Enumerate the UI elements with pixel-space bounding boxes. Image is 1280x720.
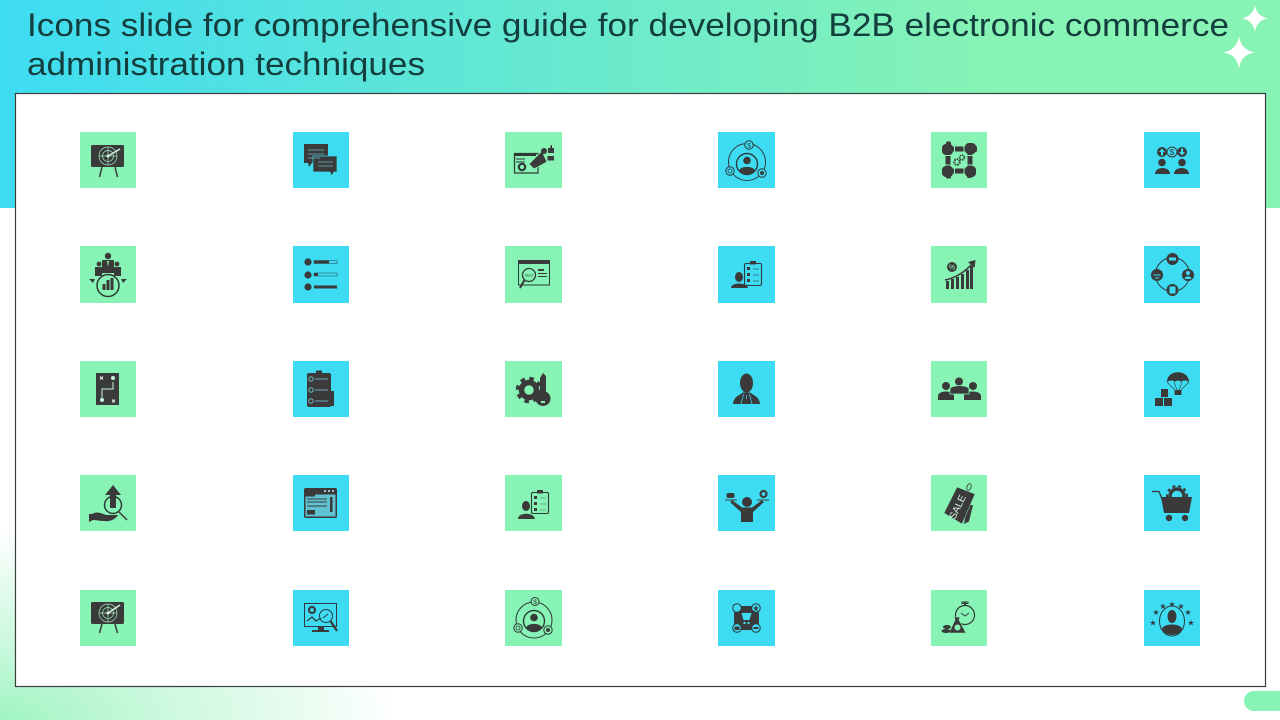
icon: top-rated person with stars: ★ (1184, 608, 1192, 617)
icon: sale price tags: SALE (948, 493, 969, 521)
icon: top-rated person with stars: ★ (1177, 602, 1185, 611)
icon: target on presentation board (80, 132, 136, 188)
icon: stopwatch and money bag (931, 590, 987, 646)
icon: people exchanging money (1144, 132, 1200, 188)
sparkle decoration (1223, 5, 1268, 69)
icon: web page window (293, 475, 349, 531)
icon: clipboard checklist (293, 361, 349, 417)
page number pill (1244, 691, 1280, 711)
icon: team of three (931, 361, 987, 417)
icon: process ring with four nodes (1144, 246, 1200, 303)
title (27, 7, 1229, 82)
title: administration techniques (27, 46, 425, 82)
icon: shopping cart with gear (1144, 475, 1200, 531)
icon: manager with clipboard on green (505, 475, 562, 531)
icon: browser with megaphone (505, 132, 562, 188)
icon: top-rated person with stars: ★ (1159, 602, 1167, 611)
header gradient band (0, 0, 1280, 208)
icon: rising sales chart with percent: % (949, 264, 955, 272)
icon: cart in four-node hub (718, 590, 775, 646)
icon: customer cycle with dollar (718, 132, 775, 188)
icon: chat bubbles (293, 132, 349, 188)
icon: customer cycle with dollar: $ (747, 142, 751, 150)
icon: parachute delivering boxes (1144, 361, 1200, 417)
icon: checklist progress bars (293, 246, 349, 303)
title: Icons slide for comprehensive guide for developing B2B electronic commerce (27, 7, 1229, 43)
bottom-left corner glow (0, 520, 420, 720)
icon: businessman (718, 361, 775, 417)
icon: target on presentation board, bottom row (80, 590, 136, 646)
icon: top-rated person with stars (1144, 590, 1200, 646)
icon: top-rated person with stars: ★ (1149, 618, 1157, 628)
icon: customer cycle on green (505, 590, 562, 646)
icon: team around growth chart (80, 246, 136, 303)
icon: strategy map (80, 361, 136, 417)
icon: top-rated person with stars: ★ (1152, 608, 1160, 617)
icon: person balancing tasks (718, 475, 775, 531)
icon: SEO search browser (505, 246, 562, 303)
icon: hand holding upward arrow with magnifier (80, 475, 136, 531)
icon: manager with clipboard (718, 246, 775, 303)
icon: hands linked around gears (931, 132, 987, 188)
icon: people exchanging money: $ (1170, 148, 1175, 157)
icon: top-rated person with stars: ★ (1168, 600, 1176, 609)
icon: SEO search browser: SEO (525, 272, 533, 278)
icon: top-rated person with stars: ★ (1187, 618, 1195, 628)
icon: customer cycle on green: $ (533, 599, 537, 606)
icon: rising sales chart with percent (931, 246, 987, 303)
icon: gear and key (505, 361, 562, 417)
icon: monitor with analytics magnifier (293, 590, 349, 646)
icon: sale price tags (931, 475, 987, 531)
